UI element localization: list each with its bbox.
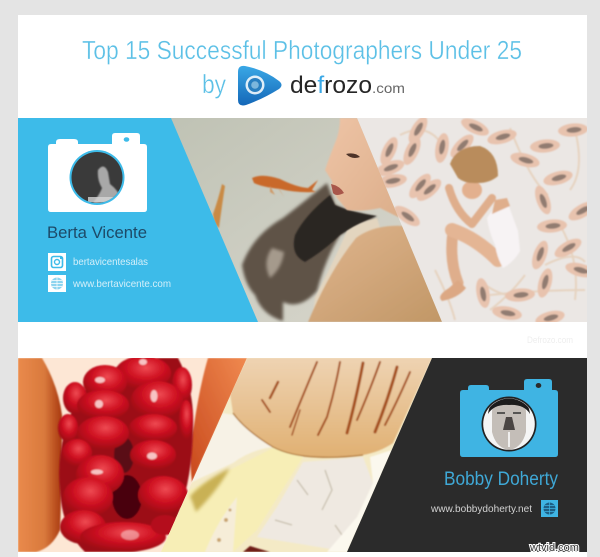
sleeping girl — [440, 146, 520, 301]
icon: camera with portrait — [48, 133, 147, 212]
wedge — [205, 497, 237, 552]
watermark: Defrozo.com: Defrozo.com — [527, 335, 573, 346]
title: Top 15 Successful Photographers Under 25 — [82, 35, 522, 65]
panel: Bobby Doherty — [18, 356, 587, 552]
right white rim — [327, 450, 392, 552]
website link: www.bertavicente.com — [72, 278, 171, 290]
face — [325, 118, 400, 218]
goldfish — [213, 176, 318, 228]
hair — [242, 183, 377, 321]
photo: raspberry between fingers — [18, 356, 253, 552]
by text: by — [202, 69, 226, 99]
watermark: wtvid.com: wtvid.com — [529, 542, 579, 554]
bread cheese — [230, 358, 432, 457]
right finger — [190, 358, 248, 482]
raspberry — [58, 356, 193, 552]
icon: globe — [48, 275, 66, 292]
left finger — [18, 358, 62, 552]
portrait: Bobby Doherty — [488, 396, 530, 450]
photo: woman with goldfish — [165, 118, 450, 322]
defrozo wordmark: defrozo — [290, 72, 372, 99]
blue diagonal panel — [18, 118, 258, 322]
cloth — [314, 218, 380, 306]
portrait: Berta Vicente — [72, 152, 122, 203]
photo: cheese — [155, 358, 440, 552]
left brie — [190, 413, 273, 483]
right brie — [257, 457, 373, 550]
icon: camera with portrait — [460, 379, 558, 457]
icon: instagram — [48, 253, 66, 271]
website link: www.bobbydoherty.net — [430, 503, 532, 515]
instagram handle: bertavicentesalas — [73, 256, 148, 268]
name: Bobby Doherty: Bobby Doherty — [444, 469, 558, 490]
name: Berta Vicente: Berta Vicente — [47, 223, 147, 242]
icon: defrozo play logo — [238, 66, 282, 105]
shoulder — [308, 226, 450, 322]
.com text: .com — [372, 80, 405, 96]
dark diagonal panel — [347, 358, 587, 552]
byline with logo — [202, 66, 405, 105]
icon: globe — [541, 500, 558, 517]
panel: Berta Vicente — [18, 114, 598, 328]
yellow soft cheese — [155, 448, 303, 552]
photo: ballet shoes on white sheet — [357, 118, 587, 322]
